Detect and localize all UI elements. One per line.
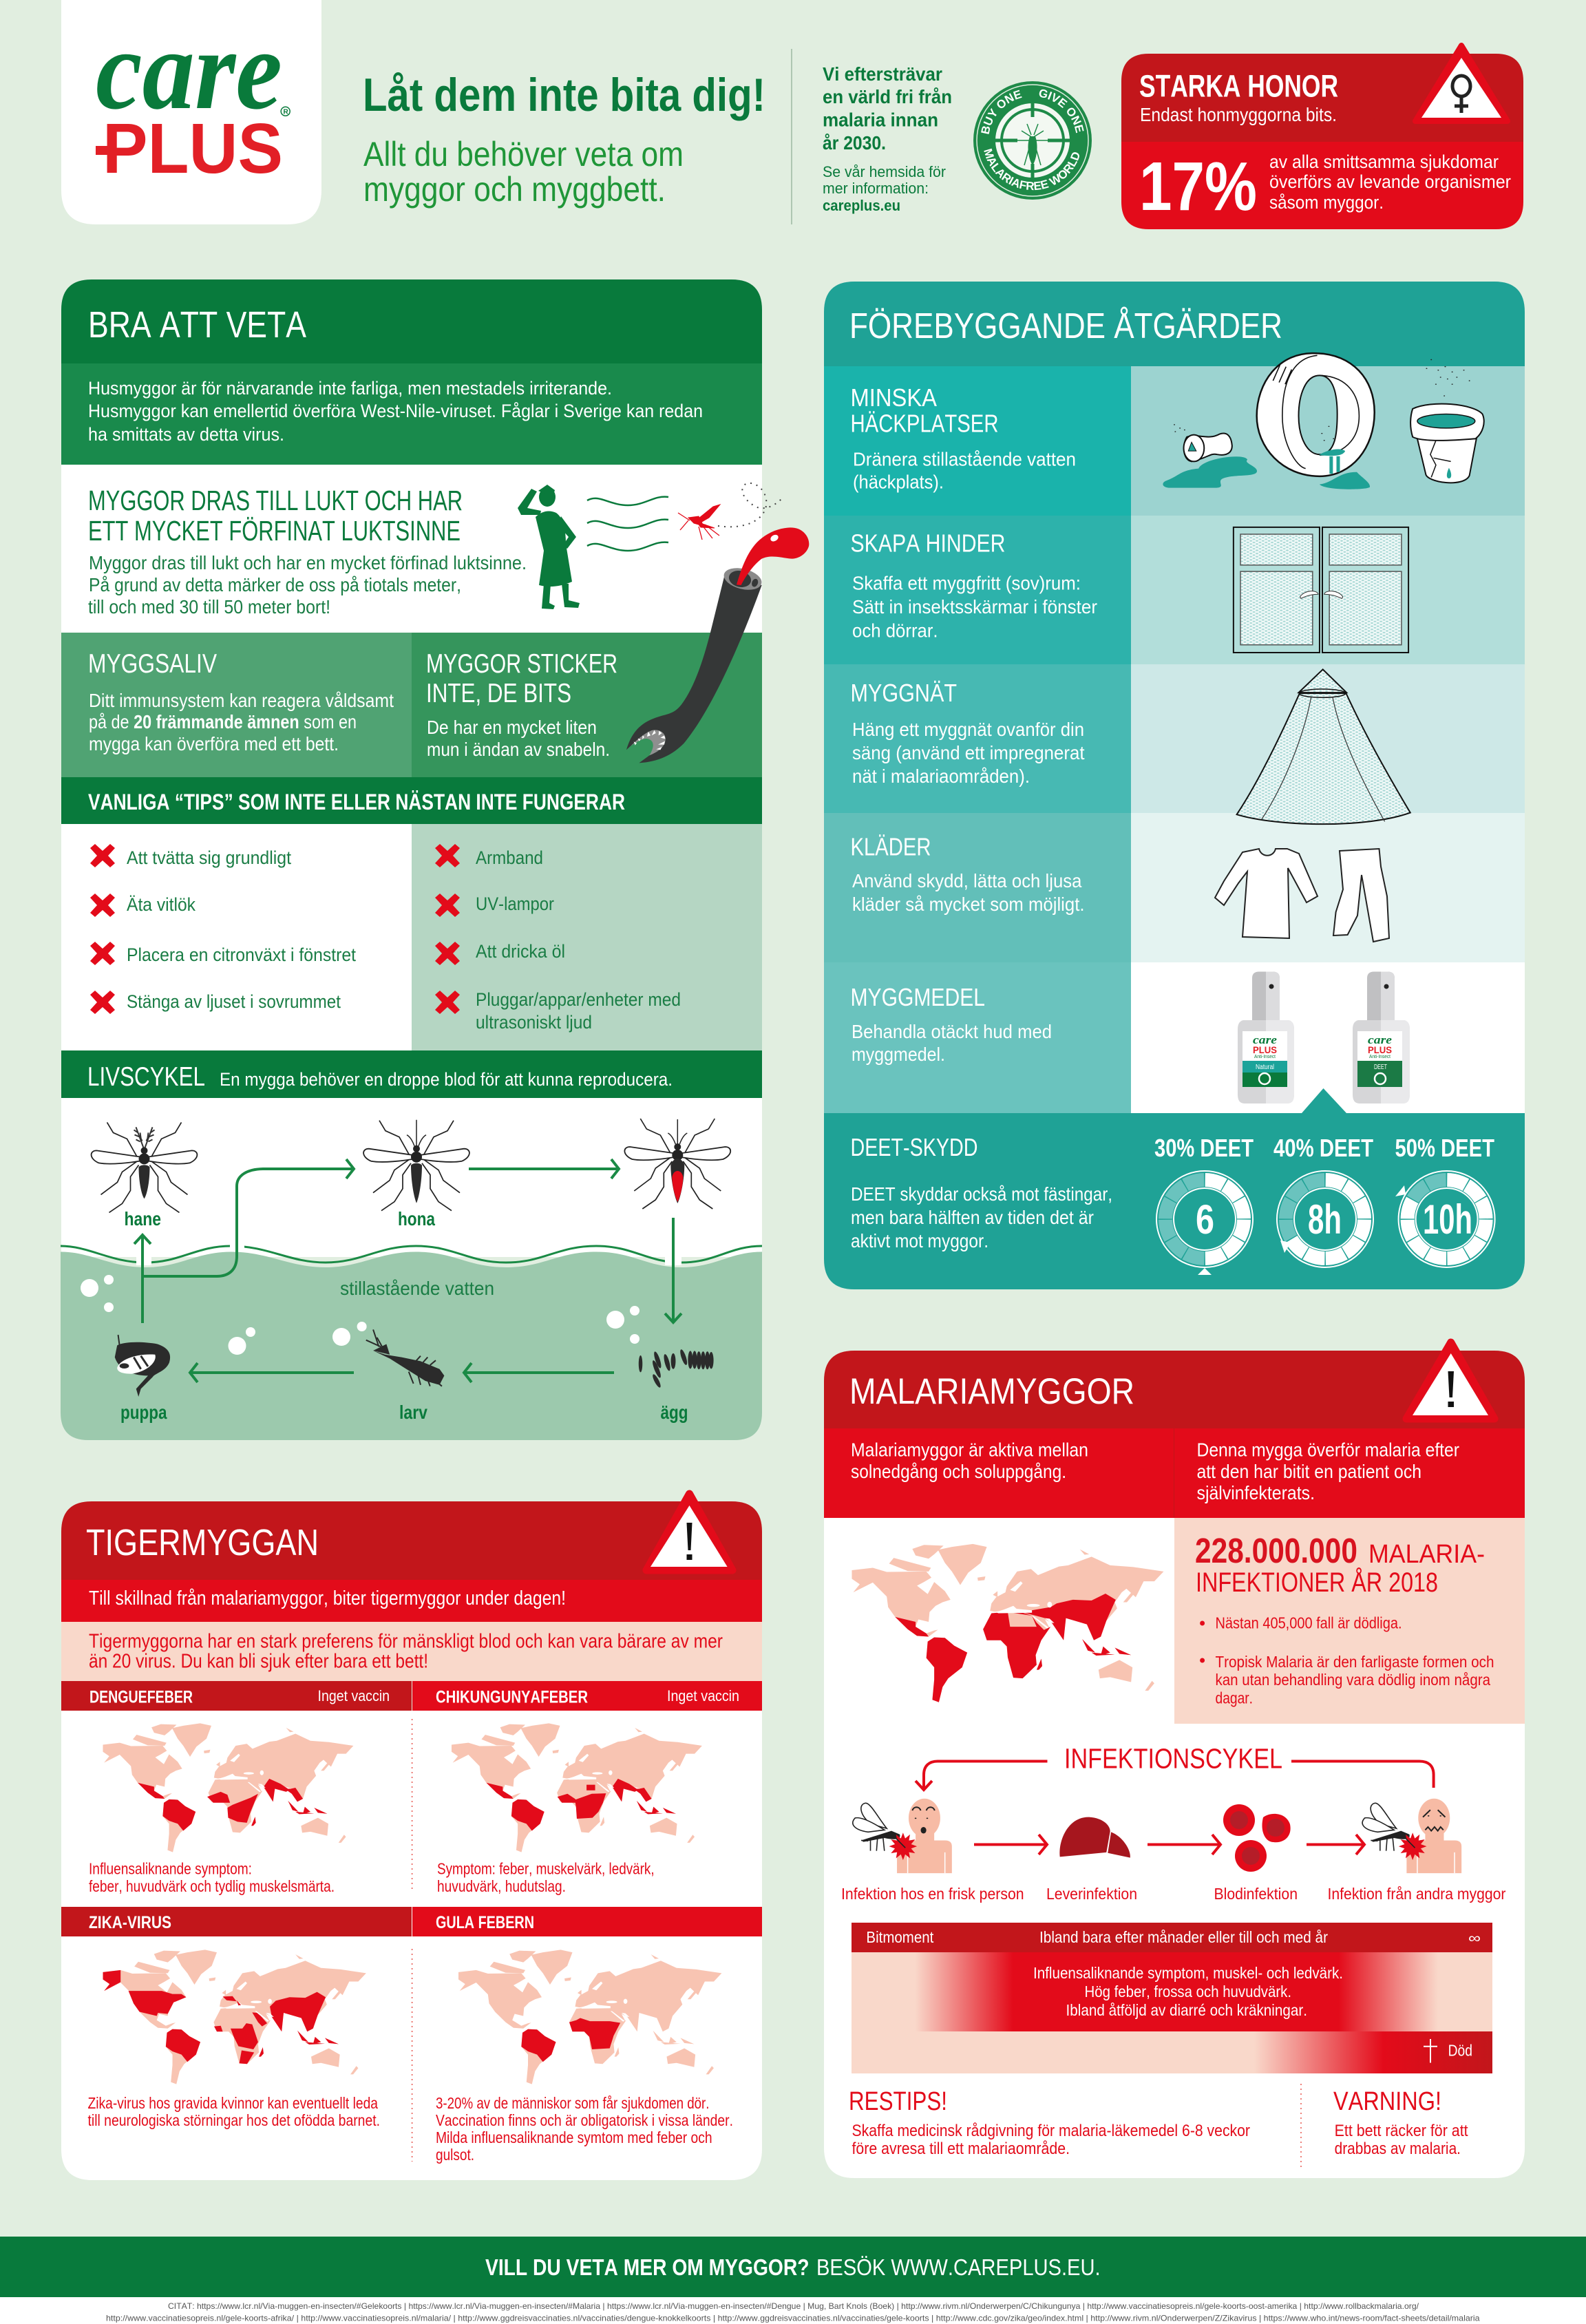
text: dengue: Influensaliknande symptom: bbox=[89, 1860, 252, 1878]
malaria goal text: careplus.eu bbox=[823, 197, 900, 214]
text: yellow fever bbox=[436, 2094, 733, 2164]
bullet list: kan utan behandling vara dödlig inom några bbox=[1216, 1671, 1490, 1689]
citations: CITAT: https://www.lcr.nl/Via-muggen-en-insecten/#Gelekoorts | https://www.lcr.nl/Via-muggen-en-insecten/#Malaria | https://www.lcr.nl/Via-muggen-en-insecten/#Dengue | Mug, Bart Knols (Boek) | http://www.rivm.nl/Onderwerpen/C/Chikungunya | http://www.vaccinatiesopreis.nl/gele-koorts-oost-amerika | http://www.rollbackmalaria.org/ bbox=[168, 2301, 1419, 2311]
map: zika bbox=[103, 1950, 366, 2084]
heading: luktsinne bbox=[88, 485, 463, 547]
malaria goal text: Vi eftersträvar bbox=[823, 63, 942, 85]
pointer notch bbox=[1302, 1088, 1346, 1113]
icon: female warning triangle bbox=[1415, 45, 1508, 121]
travel tip: före avresa till ett malariaområde. bbox=[852, 2140, 1070, 2158]
intro text bbox=[89, 1630, 723, 1673]
warning note: VARNING! bbox=[1333, 2087, 1441, 2116]
row: breeding sites bbox=[851, 383, 1076, 493]
row: clothes: kläder så mycket som möjligt. bbox=[852, 894, 1085, 915]
header: dengue bbox=[61, 1681, 412, 1711]
dial: 10 hours: 10h bbox=[1423, 1196, 1472, 1243]
text: luktsinne: till och med 30 till 50 meter bort! bbox=[88, 596, 330, 617]
row: breeding sites: HÄCKPLATSER bbox=[851, 409, 998, 438]
deet labels: 50% DEET bbox=[1395, 1134, 1494, 1162]
statistic: MALARIA- bbox=[1368, 1540, 1485, 1569]
cycle labels: Infektion från andra myggor bbox=[1327, 1885, 1506, 1903]
bottle natural: PLUS bbox=[1253, 1044, 1277, 1055]
arrows bbox=[134, 1159, 681, 1382]
icon: eggs bbox=[639, 1349, 714, 1388]
illustration: spray bottles bbox=[1238, 972, 1410, 1103]
timeline header labels bbox=[866, 1928, 1481, 1946]
dial: 6 hours: 6 bbox=[1196, 1196, 1214, 1243]
icon: pupa bbox=[115, 1335, 170, 1397]
row: breeding sites: Dränera stillastående vatten bbox=[853, 449, 1076, 469]
text: active hours: Malariamyggor är aktiva mellan bbox=[851, 1439, 1088, 1461]
cycle labels: Blodinfektion bbox=[1214, 1885, 1298, 1903]
row: bed net: nät i malariaområden). bbox=[852, 765, 1030, 787]
saliva cell bbox=[61, 633, 412, 777]
tips list bbox=[61, 824, 762, 1050]
text: på de 20 främmande ämnen som en bbox=[89, 711, 357, 732]
row: bed net bbox=[851, 679, 1085, 787]
bullet list bbox=[1200, 1614, 1494, 1707]
heading: infection cycle: INFEKTIONSCYKEL bbox=[1064, 1743, 1282, 1775]
text: zika: Zika-virus hos gravida kvinnor kan eventuellt leda bbox=[88, 2094, 378, 2112]
heading: MYGGSALIV bbox=[88, 649, 217, 679]
symptoms text: Ibland åtföljd av diarré och kräkningar. bbox=[1066, 2001, 1307, 2019]
heading: LIVSCYKEL bbox=[87, 1062, 205, 1092]
text: chikungunya: huvudvärk, hudutslag. bbox=[437, 1877, 566, 1895]
heading: BRA ATT VETA bbox=[88, 304, 306, 346]
row: deet: aktivt mot myggor. bbox=[851, 1230, 988, 1251]
panel: starka honor bbox=[1121, 45, 1523, 229]
warning note: Ett bett räcker för att bbox=[1335, 2122, 1468, 2140]
life cycle labels: hane bbox=[124, 1208, 161, 1229]
death marker: Död bbox=[1448, 2042, 1472, 2060]
row: barriers: Sätt in insektsskärmar i fönster bbox=[852, 596, 1097, 617]
row: bed net: säng (använd ett impregnerat bbox=[852, 742, 1085, 763]
text: luktsinne bbox=[88, 552, 527, 617]
row: deet: DEET-SKYDD bbox=[851, 1133, 977, 1161]
bottle natural bbox=[1238, 972, 1294, 1103]
life cycle section bbox=[61, 1050, 762, 1440]
icon: blood cells bbox=[1223, 1804, 1291, 1872]
heading: STARKA HONOR bbox=[1139, 69, 1338, 104]
tips left column bbox=[127, 847, 356, 1012]
row: barriers: Skaffa ett myggfritt (sov)rum: bbox=[852, 573, 1081, 594]
subheading: Endast honmyggorna bits. bbox=[1140, 104, 1337, 125]
heading bbox=[426, 649, 617, 708]
tips left column: Äta vitlök bbox=[127, 894, 195, 915]
panel: bra att veta bbox=[61, 279, 809, 1440]
tips left column: Placera en citronväxt i fönstret bbox=[127, 944, 356, 965]
text: active hours bbox=[851, 1439, 1088, 1482]
symptoms text: Hög feber, frossa och huvudvärk. bbox=[1085, 1983, 1291, 2000]
tips right column: Armband bbox=[476, 847, 543, 868]
bottle natural: Natural bbox=[1256, 1064, 1274, 1071]
deet labels bbox=[1154, 1134, 1494, 1162]
logo wordmark care: care bbox=[96, 6, 282, 133]
header: chikungunya: Inget vaccin bbox=[667, 1687, 739, 1704]
badge: malaria free world: MALARIAFREE WORLD bbox=[984, 149, 1079, 190]
bottle deet: PLUS bbox=[1368, 1044, 1392, 1055]
statistic bbox=[1195, 1531, 1485, 1598]
travel tip bbox=[849, 2087, 1250, 2158]
tips left column: Att tvätta sig grundligt bbox=[127, 847, 291, 868]
icon: female mosquito bbox=[363, 1120, 469, 1211]
tips band: VANLIGA “TIPS” SOM INTE ELLER NÄSTAN INTE FUNGERAR bbox=[88, 790, 625, 814]
row: repellent: Behandla otäckt hud med bbox=[852, 1021, 1052, 1042]
subtitle bbox=[363, 135, 684, 209]
text: yellow fever: Vaccination finns och är obligatorisk i vissa länder. bbox=[436, 2111, 733, 2129]
bullet list: dagar. bbox=[1216, 1689, 1253, 1707]
timeline bbox=[852, 1923, 1492, 2073]
header: dengue: DENGUEFEBER bbox=[89, 1688, 193, 1707]
text bbox=[89, 690, 394, 754]
footer band: VILL DU VETA MER OM MYGGOR? bbox=[485, 2254, 810, 2280]
symptoms text bbox=[1033, 1964, 1343, 2019]
row: barriers bbox=[851, 529, 1097, 642]
tips left column: Stänga av ljuset i sovrummet bbox=[127, 991, 341, 1012]
row: barriers: SKAPA HINDER bbox=[851, 529, 1005, 558]
row: barriers: och dörrar. bbox=[852, 620, 938, 642]
header: yellow fever bbox=[412, 1907, 762, 1936]
row: deet: men bara hälften av tiden det är bbox=[851, 1207, 1094, 1228]
row: clothes bbox=[851, 833, 1085, 915]
life cycle labels: hona bbox=[398, 1208, 435, 1229]
map: dengue bbox=[103, 1723, 353, 1852]
intro text: Husmyggor kan emellertid överföra West-Nile-viruset. Fåglar i Sverige kan redan bbox=[88, 401, 703, 421]
text: yellow fever: gulsot. bbox=[436, 2146, 474, 2164]
panel: tigermyggan bbox=[61, 1494, 762, 2180]
malaria goal text: Se vår hemsida för bbox=[823, 163, 946, 180]
header: zika: ZIKA-VIRUS bbox=[89, 1913, 171, 1932]
timeline header labels: Bitmoment bbox=[866, 1928, 934, 1946]
icon: larva bbox=[366, 1329, 444, 1386]
text bbox=[427, 717, 610, 760]
text: Ditt immunsystem kan reagera våldsamt bbox=[89, 690, 394, 711]
row: repellent bbox=[851, 983, 1052, 1065]
text: mygga kan överföra med ett bett. bbox=[89, 733, 339, 754]
map: malaria bbox=[852, 1544, 1163, 1702]
subheading: En mygga behöver en droppe blod för att kunna reproducera. bbox=[220, 1069, 673, 1090]
badge: malaria free world: GIVE ONE bbox=[1039, 89, 1084, 134]
main title: Låt dem inte bita dig! bbox=[363, 69, 765, 121]
bullet list: Nästan 405,000 fall är dödliga. bbox=[1216, 1614, 1402, 1632]
dial: 8 hours: 8h bbox=[1308, 1196, 1342, 1243]
bottle deet: care bbox=[1368, 1033, 1393, 1046]
bubbles bbox=[81, 1275, 639, 1355]
tips right column: Att dricka öl bbox=[476, 941, 565, 962]
icon: odor waves bbox=[587, 497, 668, 551]
life cycle labels: larv bbox=[399, 1402, 427, 1423]
bottle deet: DEET bbox=[1374, 1064, 1387, 1071]
registered mark bbox=[281, 107, 290, 116]
symptoms text: Influensaliknande symptom, muskel- och ledvärk. bbox=[1033, 1964, 1343, 1982]
tips right column: Pluggar/appar/enheter med bbox=[476, 989, 681, 1010]
deet labels: 30% DEET bbox=[1154, 1134, 1254, 1162]
bottle deet: Anti-Insect bbox=[1369, 1055, 1391, 1059]
warning note: drabbas av malaria. bbox=[1335, 2140, 1461, 2158]
row: clothes: Använd skydd, lätta och ljusa bbox=[852, 870, 1082, 891]
row: bed net: Häng ett myggnät ovanför din bbox=[852, 719, 1084, 740]
statistic: 228.000.000 bbox=[1195, 1531, 1357, 1570]
text: luktsinne: Myggor dras till lukt och har en mycket förfinad luktsinne. bbox=[89, 552, 527, 573]
malaria goal text bbox=[823, 63, 952, 214]
row: clothes: KLÄDER bbox=[851, 833, 931, 861]
intro text: Tigermyggorna har en stark preferens för mänskligt blod och kan vara bärare av mer bbox=[89, 1630, 723, 1652]
text: transmission: självinfekterats. bbox=[1196, 1482, 1315, 1503]
dial: 6 hours bbox=[1156, 1171, 1253, 1275]
icon: infected person bitten bbox=[1362, 1799, 1461, 1873]
heading: MALARIAMYGGOR bbox=[849, 1371, 1134, 1412]
text: luktsinne: På grund av detta märker de oss på tiotals meter, bbox=[89, 574, 461, 595]
cycle labels: Leverinfektion bbox=[1046, 1885, 1137, 1903]
row: breeding sites: MINSKA bbox=[851, 383, 937, 412]
warning note bbox=[1333, 2087, 1468, 2158]
deet labels: 40% DEET bbox=[1273, 1134, 1373, 1162]
tips right column bbox=[476, 847, 681, 1033]
header: yellow fever: GULA FEBERN bbox=[436, 1913, 534, 1932]
icon: person smelling bbox=[518, 485, 580, 609]
badge: malaria free world bbox=[973, 81, 1092, 200]
row: breeding sites: (häckplats). bbox=[853, 472, 944, 493]
malaria goal text: en värld fri från bbox=[823, 86, 952, 107]
icon: blood fed mosquito bbox=[624, 1119, 730, 1209]
tips band bbox=[61, 777, 762, 824]
text: transmission bbox=[1196, 1439, 1459, 1503]
icon: red mosquito bbox=[678, 505, 720, 540]
intro text: Husmyggor är för närvarande inte farliga, men mestadels irriterande. bbox=[88, 378, 612, 399]
dial: 8 hours bbox=[1277, 1171, 1373, 1267]
text: chikungunya: Symptom: feber, muskelvärk, ledvärk, bbox=[437, 1860, 655, 1878]
row: deet bbox=[851, 1133, 1112, 1251]
icon: liver bbox=[1059, 1817, 1130, 1858]
icon: flight path bbox=[718, 483, 781, 527]
registered mark: R bbox=[284, 109, 289, 116]
citations: http://www.vaccinatiesopreis.nl/gele-koorts-afrika/ | http://www.vaccinatiesopreis.nl/malaria/ | http://www.ggdreisvaccinaties.nl/vaccinaties/dengue-knokkelkoorts | http://www.ggdreisvaccinaties.nl/vaccinaties/gele-koorts | http://www.cdc.gov/zika/geo/index.html | http://www.rivm.nl/Onderwerpen/Z/Zikavirus | https://www.who.int/news-room/fact-sheets/detail/malaria bbox=[106, 2314, 1480, 2323]
timeline header labels: Ibland bara efter månader eller till och med år bbox=[1039, 1928, 1328, 1946]
arrows: infection cycle bbox=[916, 1761, 1434, 1855]
row: deet: DEET skyddar också mot fästingar, bbox=[851, 1183, 1112, 1205]
illustration: bed net bbox=[1237, 669, 1410, 824]
tips right column: ultrasoniskt ljud bbox=[476, 1012, 592, 1033]
logo card bbox=[61, 0, 321, 224]
statistic text bbox=[1269, 151, 1511, 213]
death marker bbox=[1424, 2039, 1472, 2062]
intro text bbox=[88, 378, 703, 445]
icon: warning triangle bbox=[646, 1494, 732, 1570]
bottle natural: care bbox=[1253, 1033, 1278, 1046]
cycle labels: Infektion hos en frisk person bbox=[841, 1885, 1024, 1903]
icon: male mosquito bbox=[92, 1122, 197, 1212]
icon: warning triangle bbox=[1406, 1342, 1494, 1419]
text: transmission: att den har bitit en patient och bbox=[1196, 1461, 1421, 1482]
malaria goal text: mer information: bbox=[823, 180, 929, 197]
illustration: proboscis with blood bbox=[626, 527, 809, 763]
alert line: Till skillnad från malariamyggor, biter tigermyggor under dagen! bbox=[89, 1587, 566, 1609]
header: dengue: Inget vaccin bbox=[318, 1687, 390, 1704]
statistic text: såsom myggor. bbox=[1269, 192, 1384, 213]
logo wordmark plus: PLUS bbox=[103, 109, 283, 188]
bottle natural: Anti-Insect bbox=[1254, 1055, 1276, 1059]
malaria goal text: malaria innan bbox=[823, 109, 938, 131]
statistic text: av alla smittsamma sjukdomar bbox=[1269, 151, 1499, 172]
map: yellow fever bbox=[458, 1950, 721, 2084]
statistic: INFEKTIONER ÅR 2018 bbox=[1196, 1567, 1438, 1598]
statistic 17%: 17% bbox=[1139, 148, 1257, 225]
travel tip: RESTIPS! bbox=[849, 2087, 947, 2116]
text: active hours: solnedgång och soluppgång. bbox=[851, 1461, 1066, 1482]
text: dengue bbox=[89, 1860, 335, 1895]
header: chikungunya bbox=[412, 1681, 762, 1711]
statistic text: överförs av levande organismer bbox=[1269, 171, 1511, 192]
subtitle: Allt du behöver veta om bbox=[363, 135, 684, 173]
row: bed net: MYGGNÄT bbox=[851, 679, 957, 707]
panel: malariamyggor bbox=[824, 1342, 1525, 2178]
subtitle: myggor och myggbett. bbox=[363, 170, 666, 209]
bottle deet bbox=[1353, 972, 1410, 1103]
icon: healthy person bitten bbox=[853, 1799, 952, 1873]
life cycle labels bbox=[120, 1208, 688, 1423]
heading: MYGGOR STICKER bbox=[426, 649, 617, 679]
life cycle labels: ägg bbox=[661, 1402, 688, 1423]
text: yellow fever: 3-20% av de människor som får sjukdomen dör. bbox=[436, 2094, 709, 2112]
water bbox=[61, 1251, 762, 1440]
citations bbox=[0, 2297, 1586, 2324]
bullet list: Tropisk Malaria är den farligaste formen och bbox=[1216, 1653, 1494, 1671]
illustration: stagnant water containers bbox=[1163, 353, 1484, 489]
footer band bbox=[0, 2237, 1586, 2297]
text: chikungunya bbox=[437, 1860, 655, 1895]
travel tip: Skaffa medicinsk rådgivning för malaria-läkemedel 6-8 veckor bbox=[852, 2122, 1250, 2140]
illustration: window with screens bbox=[1234, 527, 1408, 653]
text: mun i ändan av snabeln. bbox=[427, 739, 610, 760]
row: repellent: myggmedel. bbox=[852, 1044, 945, 1065]
panel: förebyggande åtgärder bbox=[824, 282, 1525, 1289]
badge: malaria free world: BUY ONE bbox=[981, 89, 1022, 134]
map: chikungunya bbox=[452, 1723, 702, 1852]
text: De har en mycket liten bbox=[427, 717, 597, 738]
dial: 10 hours bbox=[1395, 1171, 1495, 1267]
heading: INTE, DE BITS bbox=[426, 679, 571, 708]
heading: luktsinne: MYGGOR DRAS TILL LUKT OCH HAR bbox=[88, 485, 463, 516]
life cycle labels: puppa bbox=[120, 1402, 167, 1423]
malaria goal text: år 2030. bbox=[823, 132, 886, 154]
icons: red crosses bbox=[90, 844, 460, 1014]
timeline header labels: ∞ bbox=[1468, 1931, 1481, 1946]
intro text: ha smittats av detta virus. bbox=[88, 424, 284, 445]
header: chikungunya: CHIKUNGUNYAFEBER bbox=[436, 1688, 588, 1707]
intro text: än 20 virus. Du kan bli sjuk efter bara ett bett! bbox=[89, 1651, 428, 1673]
header: zika bbox=[61, 1907, 412, 1936]
text: transmission: Denna mygga överför malaria efter bbox=[1196, 1439, 1459, 1461]
text: dengue: feber, huvudvärk och tydlig muskelsmärta. bbox=[89, 1877, 335, 1895]
life cycle labels: stillastående vatten bbox=[340, 1278, 494, 1299]
heading: luktsinne: ETT MYCKET FÖRFINAT LUKTSINNE bbox=[88, 515, 461, 547]
cycle labels bbox=[841, 1885, 1506, 1903]
tips right column: UV-lampor bbox=[476, 894, 554, 914]
row: repellent: MYGGMEDEL bbox=[851, 983, 985, 1011]
text: zika bbox=[88, 2094, 380, 2129]
heading: TIGERMYGGAN bbox=[86, 1522, 319, 1563]
text: yellow fever: Milda influensaliknande symtom med feber och bbox=[436, 2128, 712, 2146]
bite cell bbox=[412, 633, 762, 777]
illustration: clothes bbox=[1215, 849, 1389, 942]
text: zika: till neurologiska störningar hos det ofödda barnet. bbox=[88, 2111, 380, 2129]
footer band: BESÖK WWW.CAREPLUS.EU. bbox=[816, 2254, 1101, 2280]
heading: FÖREBYGGANDE ÅTGÄRDER bbox=[849, 306, 1282, 346]
